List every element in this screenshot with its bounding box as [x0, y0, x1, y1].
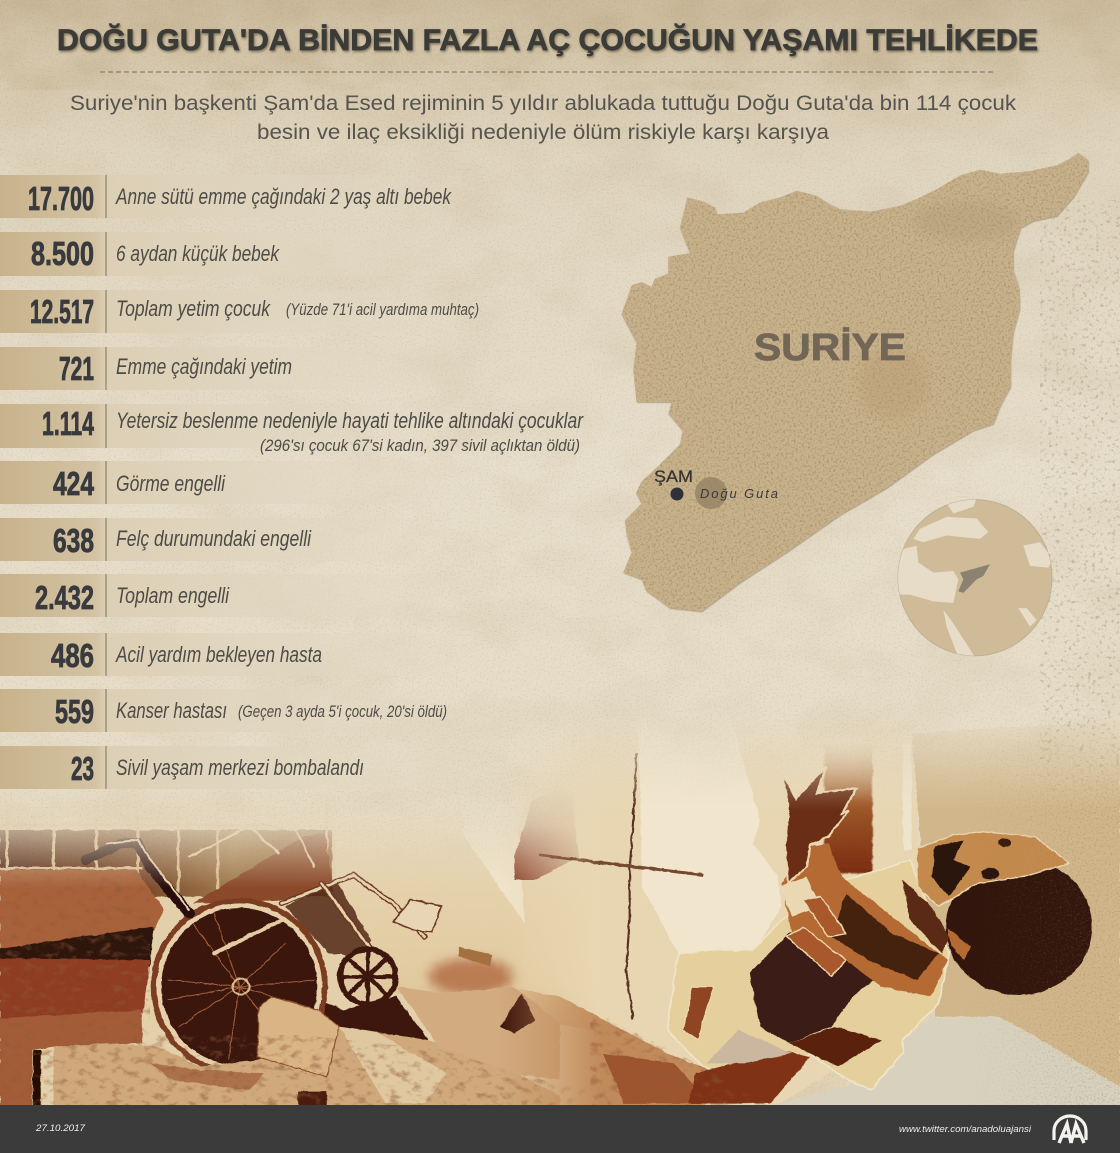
shirt shadows: [750, 932, 873, 1043]
row: 12.517: 12.517: [30, 293, 94, 330]
row: 424: Görme engelli: [116, 471, 226, 496]
statistics list: [0, 175, 584, 789]
row: 1.114: 1.114: [42, 405, 94, 442]
row: 638: [0, 518, 480, 561]
row: 486: 486: [51, 637, 94, 674]
row: 559: [0, 689, 480, 732]
row: 721: 721: [59, 350, 94, 387]
row: 486: [0, 633, 480, 676]
subtitle: Suriye'nin başkenti Şam'da Esed rejiminin 5 yıldır ablukada tuttuğu Doğu Guta'da bin 114 çocuk: [70, 92, 1017, 115]
face: [917, 832, 1069, 907]
dark rust column: [824, 743, 872, 873]
footer date: 27.10.2017: [35, 1123, 86, 1134]
label: Doğu Guta: Doğu Guta: [700, 486, 778, 501]
locator globe: [890, 498, 1053, 657]
wheelchair back panel: [193, 833, 332, 903]
rubble floor: [54, 1027, 560, 1107]
big wheel: [159, 907, 320, 1067]
row: 8.500: [0, 232, 480, 276]
row: 8.500: 8.500: [31, 235, 94, 272]
shadow below chair: [319, 996, 428, 1040]
subtitle: [70, 92, 1017, 144]
ledge: [0, 870, 164, 950]
row: 559: Kanser hastası: [116, 698, 227, 723]
wall crack: [626, 753, 637, 1020]
row: 12.517: (Yüzde 71'i acil yardıma muhtaç): [286, 300, 479, 319]
row: 12.517: [0, 290, 480, 333]
photo: starving child: [467, 720, 1120, 1110]
row: 424: [0, 461, 480, 504]
blood-stained floor: [509, 988, 770, 1105]
white sheet: [639, 744, 782, 953]
right wall: [912, 720, 1120, 1087]
row: 17.700: 17.700: [28, 180, 94, 217]
marker: Şam: [670, 488, 684, 500]
footer twitter handle: www.twitter.com/anadoluajansi: [899, 1124, 1032, 1135]
upper hand: [781, 767, 856, 883]
window: [0, 830, 332, 897]
cuff: [782, 876, 816, 917]
title: DOĞU GUTA'DA BİNDEN FAZLA AÇ ÇOCUĞUN YAŞAMI TEHLİKEDE: [57, 23, 1038, 57]
row: 17.700: Anne sütü emme çağındaki 2 yaş altı bebek: [114, 184, 452, 209]
forearm: [781, 843, 947, 997]
fallen cloth and stones: [396, 987, 560, 1080]
row: 721: [0, 347, 480, 390]
map: Syria: [622, 153, 1088, 612]
pipe: [539, 855, 703, 875]
wall left: [514, 750, 918, 1105]
icon: Anadolu Agency logo: [1054, 1116, 1086, 1143]
row: 1.114: (296'sı çocuk 67'si kadın, 397 sivil açlıktan öldü): [260, 436, 580, 455]
shirt: [667, 860, 949, 1090]
map label: SURİYE: SURİYE: [754, 327, 906, 369]
row: 638: 638: [53, 522, 94, 559]
row: 1.114: [0, 404, 584, 455]
marker: Doğu Guta area: [695, 477, 727, 509]
row: 559: (Geçen 3 ayda 5'i çocuk, 20'si öldü): [238, 702, 447, 721]
subtitle: besin ve ilaç eksikliği nedeniyle ölüm riskiyle karşı karşıya: [257, 121, 829, 144]
small caster wheel: [340, 949, 396, 1004]
row: 12.517: Toplam yetim çocuk: [116, 296, 271, 321]
row: 23: Sivil yaşam merkezi bombalandı: [116, 755, 364, 780]
row: 486: Acil yardım bekleyen hasta: [114, 642, 322, 667]
footrest: [393, 900, 441, 932]
frame: [86, 823, 425, 953]
neck: [903, 880, 949, 953]
dark frame cluster: [286, 880, 371, 957]
row: 8.500: 6 aydan küçük bebek: [116, 241, 280, 266]
row: 17.700: [0, 175, 480, 218]
footer bar: [0, 1105, 1120, 1153]
row: 559: 559: [55, 693, 94, 730]
lower fingers: [787, 927, 846, 977]
row: 23: [0, 746, 480, 789]
wall socket: [459, 947, 493, 967]
photo: wheelchair in rubble: [0, 800, 584, 1105]
label: ŞAM: ŞAM: [654, 467, 693, 486]
row: 1.114: Yetersiz beslenme nedeniyle hayati tehlike altındaki çocuklar: [116, 408, 584, 433]
hair: [946, 858, 1092, 995]
floor: [764, 1017, 1120, 1107]
row: 721: Emme çağındaki yetim: [116, 354, 292, 379]
globe: Syria highlight: [958, 564, 990, 593]
row: 2.432: Toplam engelli: [116, 583, 230, 608]
ear: [947, 928, 971, 960]
concrete block: [257, 997, 339, 1077]
row: 2.432: 2.432: [35, 579, 94, 616]
row: 2.432: [0, 574, 480, 617]
back wall: [394, 967, 578, 1028]
row: 424: 424: [53, 465, 94, 502]
row: 638: Felç durumundaki engelli: [116, 526, 312, 551]
row: 23: 23: [71, 750, 94, 787]
